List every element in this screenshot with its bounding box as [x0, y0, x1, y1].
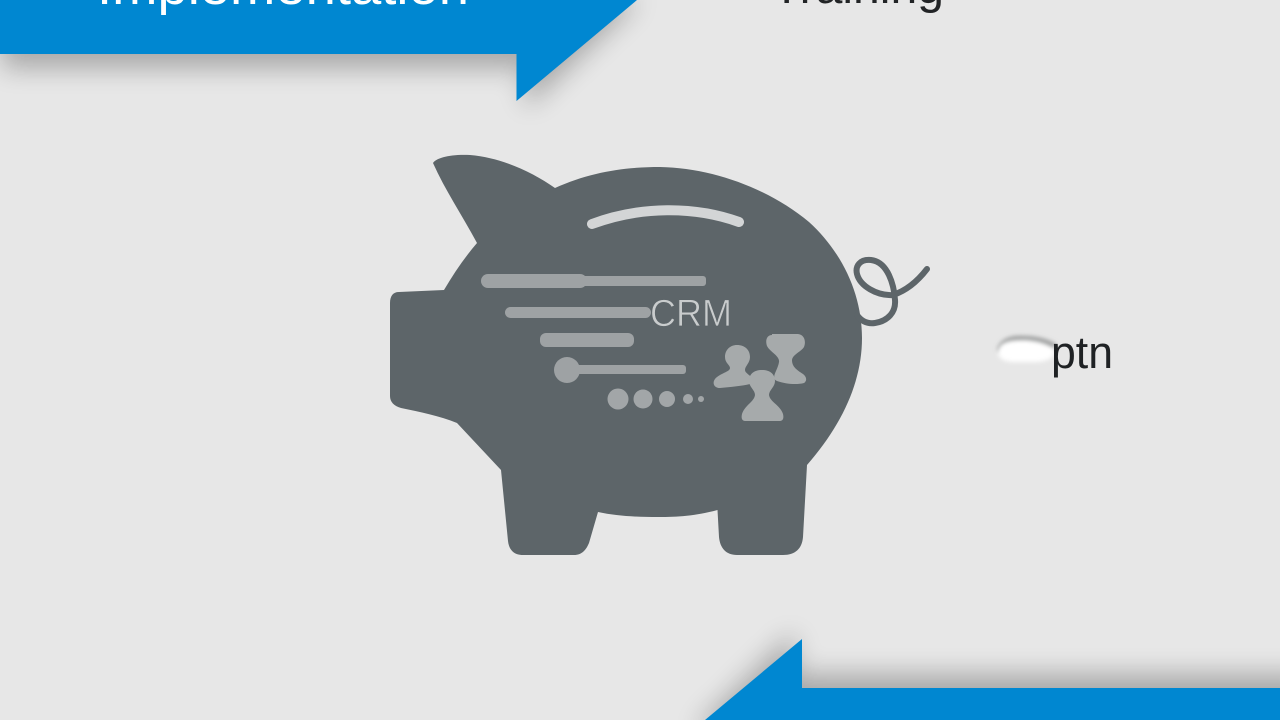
text lines [481, 274, 706, 383]
blurred label: ptn [997, 327, 1113, 378]
smudge over text [997, 336, 1056, 362]
coin slot [592, 210, 739, 224]
pig tail [857, 260, 927, 323]
blurred label: ptn: ptn [1051, 327, 1113, 378]
top banner [0, 0, 640, 108]
row of dots [608, 388, 704, 410]
pig body [390, 155, 862, 555]
piggy bank icon [390, 155, 927, 555]
people network icon [714, 334, 806, 421]
CRM label: CRM [650, 293, 732, 335]
bottom banner [694, 632, 1280, 720]
